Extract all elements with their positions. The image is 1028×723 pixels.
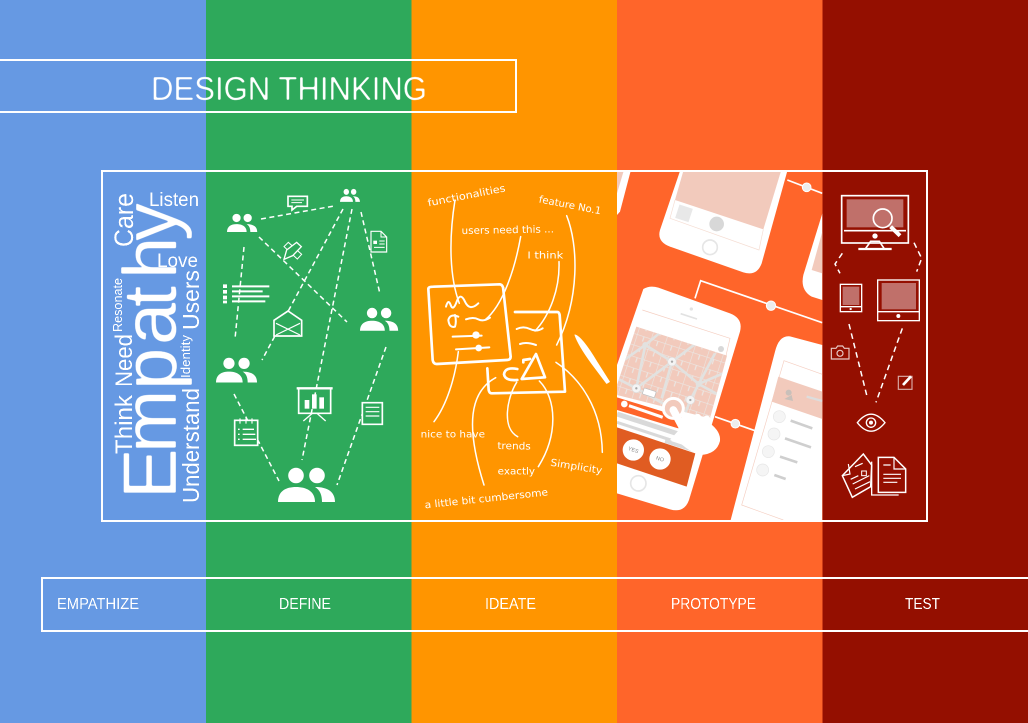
panel: define network diagram <box>216 189 398 502</box>
connector curves <box>434 200 602 485</box>
phone: top <box>659 171 787 273</box>
label: prototype: PROTOTYPE <box>671 596 756 613</box>
icon: hand tapping <box>663 398 720 455</box>
icon: people top <box>340 189 360 202</box>
handwritten notes: trends <box>497 441 531 453</box>
phone: main with map <box>617 287 741 510</box>
icon: presentation board <box>297 388 333 421</box>
title <box>0 60 516 112</box>
phone: main with map: YES <box>627 446 640 455</box>
panel: test devices <box>831 196 922 497</box>
icon: people left <box>227 214 257 232</box>
background column: test <box>822 0 1028 723</box>
dashed connections <box>234 206 386 485</box>
icon: pencil and ruler <box>284 242 302 259</box>
phone: top right <box>803 213 822 300</box>
background column: empathize <box>0 0 206 723</box>
icon: documents <box>842 454 906 497</box>
handwritten notes: users need this ... <box>462 224 554 237</box>
panel: ideate sketches <box>421 183 609 511</box>
handwritten notes: I think <box>527 251 564 262</box>
label: test: TEST <box>905 596 940 613</box>
panel: empathy word cloud: Identity <box>178 334 193 378</box>
panel: empathy word cloud: Care <box>109 193 139 247</box>
icon: camera <box>831 346 849 359</box>
background column: prototype <box>617 0 822 723</box>
handwritten notes: functionalities <box>427 183 506 209</box>
icon: receipt <box>362 403 382 424</box>
icon: envelope <box>274 311 302 336</box>
icon: notepad <box>235 418 258 445</box>
main frame <box>102 171 927 521</box>
label: ideate: IDEATE <box>485 596 536 613</box>
handwritten notes: feature No.1 <box>538 194 602 217</box>
icon: people bottom <box>278 468 335 502</box>
sketch: right wireframe <box>487 312 565 393</box>
background column: define <box>206 0 412 723</box>
icon: speech bubble <box>288 196 307 210</box>
icon: small tablet <box>840 284 862 312</box>
small icons <box>223 196 387 445</box>
panel: prototype phones <box>617 171 822 520</box>
connector lines <box>695 180 822 431</box>
sketch: left wireframe <box>428 284 511 364</box>
phone: main with map: NO <box>655 456 665 464</box>
icon: people right <box>360 308 398 331</box>
dashed links <box>835 243 922 402</box>
icon: pen <box>575 335 609 383</box>
icon: eye <box>857 414 885 431</box>
handwritten notes: exactly <box>498 466 535 477</box>
icon: pen and square <box>898 376 912 389</box>
label: define: DEFINE <box>279 596 331 613</box>
panel: empathy word cloud: Users <box>178 270 204 330</box>
info strip <box>617 397 682 428</box>
handwritten notes: Simplicity <box>550 458 603 477</box>
icon: people lower left <box>216 358 257 382</box>
list rows <box>617 414 683 436</box>
map <box>617 327 727 418</box>
phase bar <box>42 578 1028 631</box>
panel: empathy word cloud: Understand <box>178 388 204 503</box>
handwritten notes <box>421 183 603 511</box>
panel: empathy word cloud: Think <box>111 394 138 454</box>
handwritten notes: nice to have <box>421 430 485 441</box>
panel: empathy word cloud: Love <box>157 251 198 272</box>
button panel <box>617 427 695 487</box>
phone: top left sliver <box>617 171 631 215</box>
panel: empathy word cloud: Need <box>111 334 138 387</box>
panel: empathy word cloud: Resonate <box>110 278 125 332</box>
icon: desktop monitor with magnifier <box>842 196 908 249</box>
icon: large tablet <box>878 280 919 321</box>
handwritten notes: a little bit cumbersome <box>424 487 549 511</box>
panel: empathy word cloud: Listen <box>149 190 199 211</box>
background column: ideate <box>412 0 617 723</box>
panel: empathy word cloud: Empathy <box>108 203 193 499</box>
icon: text list <box>223 284 269 303</box>
title: DESIGN THINKING <box>151 70 427 107</box>
icon: document <box>371 231 387 252</box>
label: empathize: EMPATHIZE <box>57 596 139 613</box>
phone: right list <box>731 336 822 520</box>
